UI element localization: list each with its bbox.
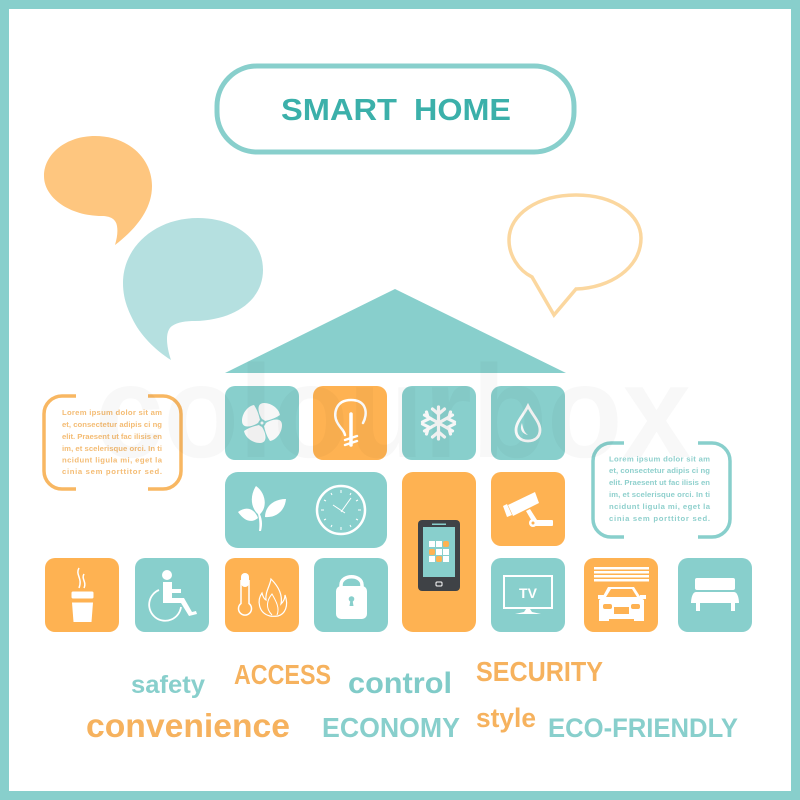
- title pill: HOME: [414, 92, 511, 127]
- tile: wheelchair: [135, 558, 209, 632]
- speech bubble: light teal: [123, 218, 263, 360]
- tile: padlock: [314, 558, 388, 632]
- text block: orange brackets: im, et scelerisque orci. In ti: [62, 444, 162, 453]
- tile: thermometer and flame: [225, 558, 299, 632]
- title pill: [217, 66, 574, 152]
- keyword cloud: control: [348, 667, 452, 700]
- watermark: colourbox: [95, 338, 691, 485]
- text block: teal brackets: [593, 443, 730, 537]
- tile: security camera: [491, 472, 565, 546]
- keyword cloud: ACCESS: [234, 659, 331, 690]
- icon: leaves: [238, 486, 286, 531]
- tile: coffee cup: [45, 558, 119, 632]
- title pill: SMART: [281, 92, 397, 127]
- keyword cloud: ECONOMY: [322, 712, 460, 743]
- speech bubble: orange: [44, 136, 152, 245]
- tile: car and garage: [584, 558, 658, 632]
- text block: teal brackets: ncidunt ligula mi, eget la: [609, 502, 711, 511]
- keyword cloud: safety: [131, 671, 205, 699]
- text block: orange brackets: Lorem ipsum dolor sit am: [62, 408, 162, 417]
- text block: teal brackets: et, consectetur adipis ci ng: [609, 466, 710, 475]
- tile: leaves and clock: [225, 472, 387, 548]
- text block: teal brackets: cinia sem porttitor sed.: [609, 514, 710, 523]
- tile: light bulb: [313, 386, 387, 460]
- tile: fan: [225, 386, 299, 460]
- text block: orange brackets: elit. Praesent ut fac ilisis en: [62, 432, 162, 441]
- keyword cloud: ECO-FRIENDLY: [548, 713, 738, 743]
- text block: teal brackets: elit. Praesent ut fac ilisis en: [609, 478, 710, 487]
- keyword cloud: style: [476, 703, 536, 733]
- text block: orange brackets: ncidunt ligula mi, eget la: [62, 456, 163, 464]
- text block: teal brackets: im, et scelerisque orci. In ti: [609, 490, 710, 499]
- keyword cloud: [86, 656, 738, 744]
- text block: teal brackets: Lorem ipsum dolor sit am: [609, 454, 710, 464]
- text block: orange brackets: cinia sem porttitor sed.: [62, 467, 162, 476]
- tile: water drop: [491, 386, 565, 460]
- tile: television: [491, 558, 565, 632]
- roof: [225, 289, 566, 373]
- keyword cloud: SECURITY: [476, 656, 603, 687]
- tile: television: TV: [519, 585, 538, 601]
- text block: orange brackets: [44, 396, 181, 489]
- tile: snowflake: [402, 386, 476, 460]
- tile: sofa: [678, 558, 752, 632]
- tile: smartphone: [402, 472, 476, 632]
- speech bubble: outline: [509, 195, 641, 315]
- keyword cloud: convenience: [86, 707, 290, 744]
- icon: clock: [317, 486, 365, 534]
- text block: orange brackets: et, consectetur adipis ci ng: [62, 420, 162, 429]
